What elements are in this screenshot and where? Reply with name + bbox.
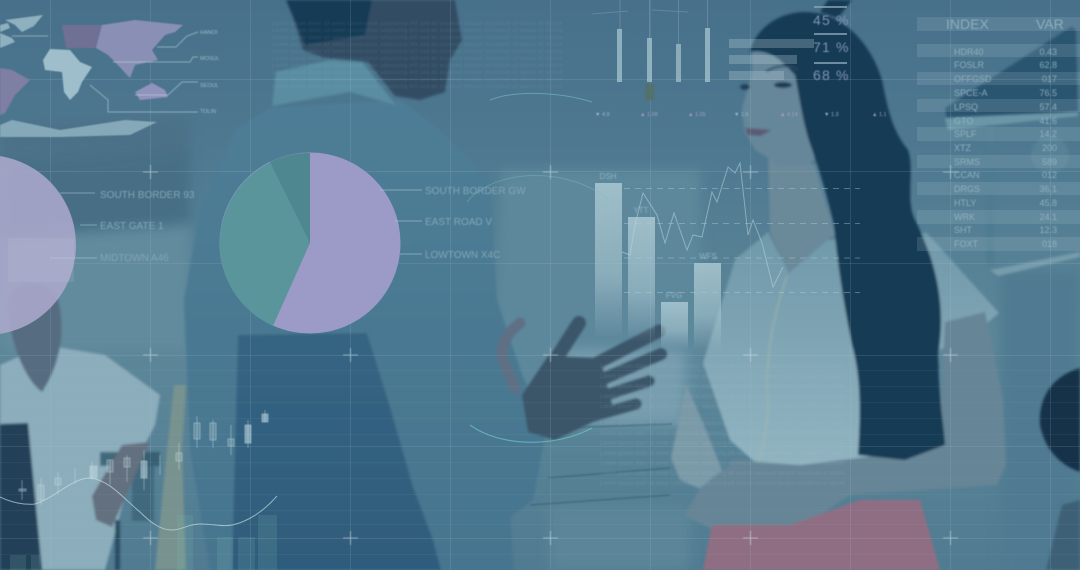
grid crosses	[143, 165, 958, 545]
table text: WRK	[954, 212, 975, 222]
map labels: HANOI	[200, 30, 218, 36]
ticker row: ▼ 1.5	[734, 112, 749, 118]
percent stats: 71 %	[813, 39, 850, 55]
table text: 0.43	[1039, 47, 1057, 57]
paragraph text block: bottom: Lorem ipsum dolor sit amet consectetur adipiscing elit sed do eiusmod tempor incididunt ut labore	[600, 421, 846, 427]
table text: INDEX	[946, 16, 989, 32]
paragraph text block: bottom: Lorem ipsum dolor sit amet consectetur adipiscing elit sed do eiusmod tempor incididunt ut labore	[600, 481, 846, 487]
paragraph text block: bottom: Lorem ipsum dolor sit amet consectetur adipiscing elit sed do eiusmod tempor incididunt ut labore	[600, 404, 846, 410]
table text: CCAN	[954, 170, 980, 180]
table row bands	[917, 17, 1080, 251]
fine horizontal scan lines	[0, 370, 1080, 554]
paragraph text block: top	[272, 21, 562, 90]
map labels: MOSUL	[200, 56, 220, 62]
bars	[595, 183, 622, 338]
woman hair	[750, 12, 945, 460]
pie chart: left: SOUTH BORDER 93	[100, 190, 195, 201]
ticker row: ▲ 4.14	[780, 112, 798, 118]
percent stats	[729, 6, 850, 83]
map: Asia	[96, 20, 183, 78]
paragraph text block: bottom: Lorem ipsum dolor sit amet consectetur adipiscing elit sed do eiusmod tempor incididunt ut labore	[600, 384, 846, 390]
paragraph text block: top: Lorem ipsum dolor sit amet consectetur adipiscing elit sed do eiusmod tempor incididunt ut labore et dolore	[272, 35, 562, 41]
man torso	[184, 100, 547, 570]
teal arcs	[467, 175, 613, 203]
table text: GTO	[954, 116, 973, 126]
percent stats: 68 %	[813, 67, 850, 83]
dashed guides	[624, 188, 860, 292]
paragraph text block: bottom: Lorem ipsum dolor sit amet consectetur adipiscing elit sed do eiusmod tempor incididunt ut labore	[600, 374, 846, 380]
table text: XTZ	[954, 143, 972, 153]
table text: 12.3	[1039, 225, 1057, 235]
man hand	[522, 323, 661, 440]
table text: HDR40	[954, 47, 984, 57]
wave line	[0, 478, 277, 530]
table text: 14.2	[1039, 129, 1057, 139]
bar labels: FVG	[666, 291, 682, 300]
paragraph text block: bottom: Lorem ipsum dolor sit amet consectetur adipiscing elit sed do eiusmod tempor incididunt ut labore	[600, 431, 846, 437]
table text: 45.8	[1039, 198, 1057, 208]
table text: 57.4	[1039, 102, 1057, 112]
table text	[946, 16, 1064, 249]
table text: 36.1	[1039, 184, 1057, 194]
table text: FOSLR	[954, 60, 985, 70]
world map	[0, 15, 220, 137]
paragraph text block: top: Lorem ipsum dolor sit amet consectetur adipiscing elit sed do eiusmod tempor incididunt ut labore et dolore	[272, 84, 562, 90]
table text: 62.8	[1039, 60, 1057, 70]
woman left arm	[671, 385, 722, 490]
bar labels: YTT	[633, 206, 649, 215]
woman neck	[768, 150, 835, 273]
photo: man seen from behind	[184, 0, 661, 570]
photo: person at bottom right and wall board	[945, 26, 1080, 570]
paragraph text block: top: Lorem ipsum dolor sit amet consectetur adipiscing elit sed do eiusmod tempor incididunt ut labore et dolore	[272, 49, 562, 55]
table text: 012	[1042, 170, 1057, 180]
map connector lines	[12, 32, 198, 112]
table text: OFFGSD	[954, 74, 992, 84]
photo: woman	[671, 0, 1006, 570]
woman right arm	[684, 312, 1006, 535]
ticker row: ▼ 4.9	[595, 112, 610, 118]
table text: VAR	[1036, 16, 1064, 32]
paragraph text block: bottom: Lorem ipsum dolor sit amet consectetur adipiscing elit sed do eiusmod tempor incididunt ut labore	[600, 461, 846, 467]
map: South America	[0, 68, 30, 115]
percent stats: 45 %	[813, 12, 850, 28]
paragraph text block: top: Lorem ipsum dolor sit amet consectetur adipiscing elit sed do eiusmod tempor incididunt ut labore et dolore	[272, 77, 562, 83]
paragraph text block: top: Lorem ipsum dolor sit amet consectetur adipiscing elit sed do eiusmod tempor incididunt ut labore et dolore	[272, 21, 562, 27]
pie chart: center: SOUTH BORDER GW	[425, 186, 526, 197]
map: Europe	[62, 25, 102, 48]
ticker row: ▲ 1.08	[640, 112, 658, 118]
table text: 017	[1042, 74, 1057, 84]
ticker row: ▼ 1.3	[824, 112, 839, 118]
table text: SRMS	[954, 157, 980, 167]
bar chart with line	[467, 93, 860, 442]
table text: DRGS	[954, 184, 980, 194]
woman face	[742, 52, 814, 165]
man neck and head	[288, 0, 462, 100]
paragraph text block: top: Lorem ipsum dolor sit amet consectetur adipiscing elit sed do eiusmod tempor incididunt ut labore et dolore	[272, 56, 562, 62]
line series	[622, 163, 783, 287]
woman skirt	[703, 500, 940, 570]
bar labels: WFS	[699, 252, 717, 261]
bar labels: DSH	[600, 172, 617, 181]
table text: SPCE-A	[954, 88, 988, 98]
index table	[917, 16, 1080, 251]
map labels: SEOUL	[200, 83, 219, 89]
table text: 76.5	[1039, 88, 1057, 98]
map: Australia	[135, 83, 168, 100]
paragraph text block: bottom: Lorem ipsum dolor sit amet consectetur adipiscing elit sed do eiusmod tempor incididunt ut labore	[600, 364, 846, 370]
ticker row	[595, 112, 887, 118]
pie chart: center: EAST ROAD V	[425, 217, 492, 228]
map: Africa	[43, 49, 92, 100]
table text: HTLY	[954, 198, 976, 208]
pie chart: left: EAST GATE 1	[100, 221, 164, 232]
paragraph text block: bottom: Lorem ipsum dolor sit amet consectetur adipiscing elit sed do eiusmod tempor incididunt ut labore	[600, 394, 846, 400]
man dark vest shadow	[232, 333, 441, 570]
paragraph text block: top: Lorem ipsum dolor sit amet consectetur adipiscing elit sed do eiusmod tempor incididunt ut labore et dolore	[272, 63, 562, 69]
map labels	[200, 30, 220, 115]
table text: SPLF	[954, 129, 977, 139]
woman shirt	[703, 232, 999, 470]
woman shirt placket	[758, 276, 787, 465]
man hair	[286, 0, 372, 45]
paragraph text block: bottom	[600, 364, 846, 487]
ticker row: ▲ 1.05	[688, 112, 706, 118]
man collar	[272, 60, 396, 106]
candlestick chart	[19, 410, 268, 505]
paragraph text block: bottom: Lorem ipsum dolor sit amet consectetur adipiscing elit sed do eiusmod tempor incididunt ut labore	[600, 451, 846, 457]
paragraph text block: bottom: Lorem ipsum dolor sit amet consectetur adipiscing elit sed do eiusmod tempor incididunt ut labore	[600, 471, 846, 477]
map labels: TOLIN	[200, 109, 216, 115]
table text: LPSQ	[954, 102, 978, 112]
table text: 589	[1042, 157, 1057, 167]
table text: 41.6	[1039, 116, 1057, 126]
table text: 200	[1042, 143, 1057, 153]
paragraph text block: top: Lorem ipsum dolor sit amet consectetur adipiscing elit sed do eiusmod tempor incididunt ut labore et dolore	[272, 28, 562, 34]
ticker row: ▲ 1.1	[872, 112, 887, 118]
paragraph text block: top: Lorem ipsum dolor sit amet consectetur adipiscing elit sed do eiusmod tempor incididunt ut labore et dolore	[272, 42, 562, 48]
table text: SHT	[954, 225, 973, 235]
paragraph text block: top: Lorem ipsum dolor sit amet consectetur adipiscing elit sed do eiusmod tempor incididunt ut labore et dolore	[272, 70, 562, 76]
pie chart: center	[220, 152, 526, 334]
man back hand	[502, 323, 520, 388]
table text: FOXT	[954, 239, 979, 249]
map: Greenland and North America	[0, 15, 43, 48]
vertical bars top	[592, 0, 710, 100]
bar labels	[600, 172, 717, 300]
office window slats	[530, 424, 672, 505]
table text: 24.1	[1039, 212, 1057, 222]
table text: 018	[1042, 239, 1057, 249]
pie chart: center: LOWTOWN X4C	[425, 250, 500, 261]
paragraph text block: bottom: Lorem ipsum dolor sit amet consectetur adipiscing elit sed do eiusmod tempor incididunt ut labore	[600, 441, 846, 447]
pie chart: left: MIDTOWN A46	[100, 253, 169, 264]
faded bars bottom left	[10, 515, 277, 570]
pie chart: left	[0, 155, 195, 335]
photo: background colleague on the left	[0, 284, 186, 570]
map: Antarctica	[0, 120, 157, 137]
